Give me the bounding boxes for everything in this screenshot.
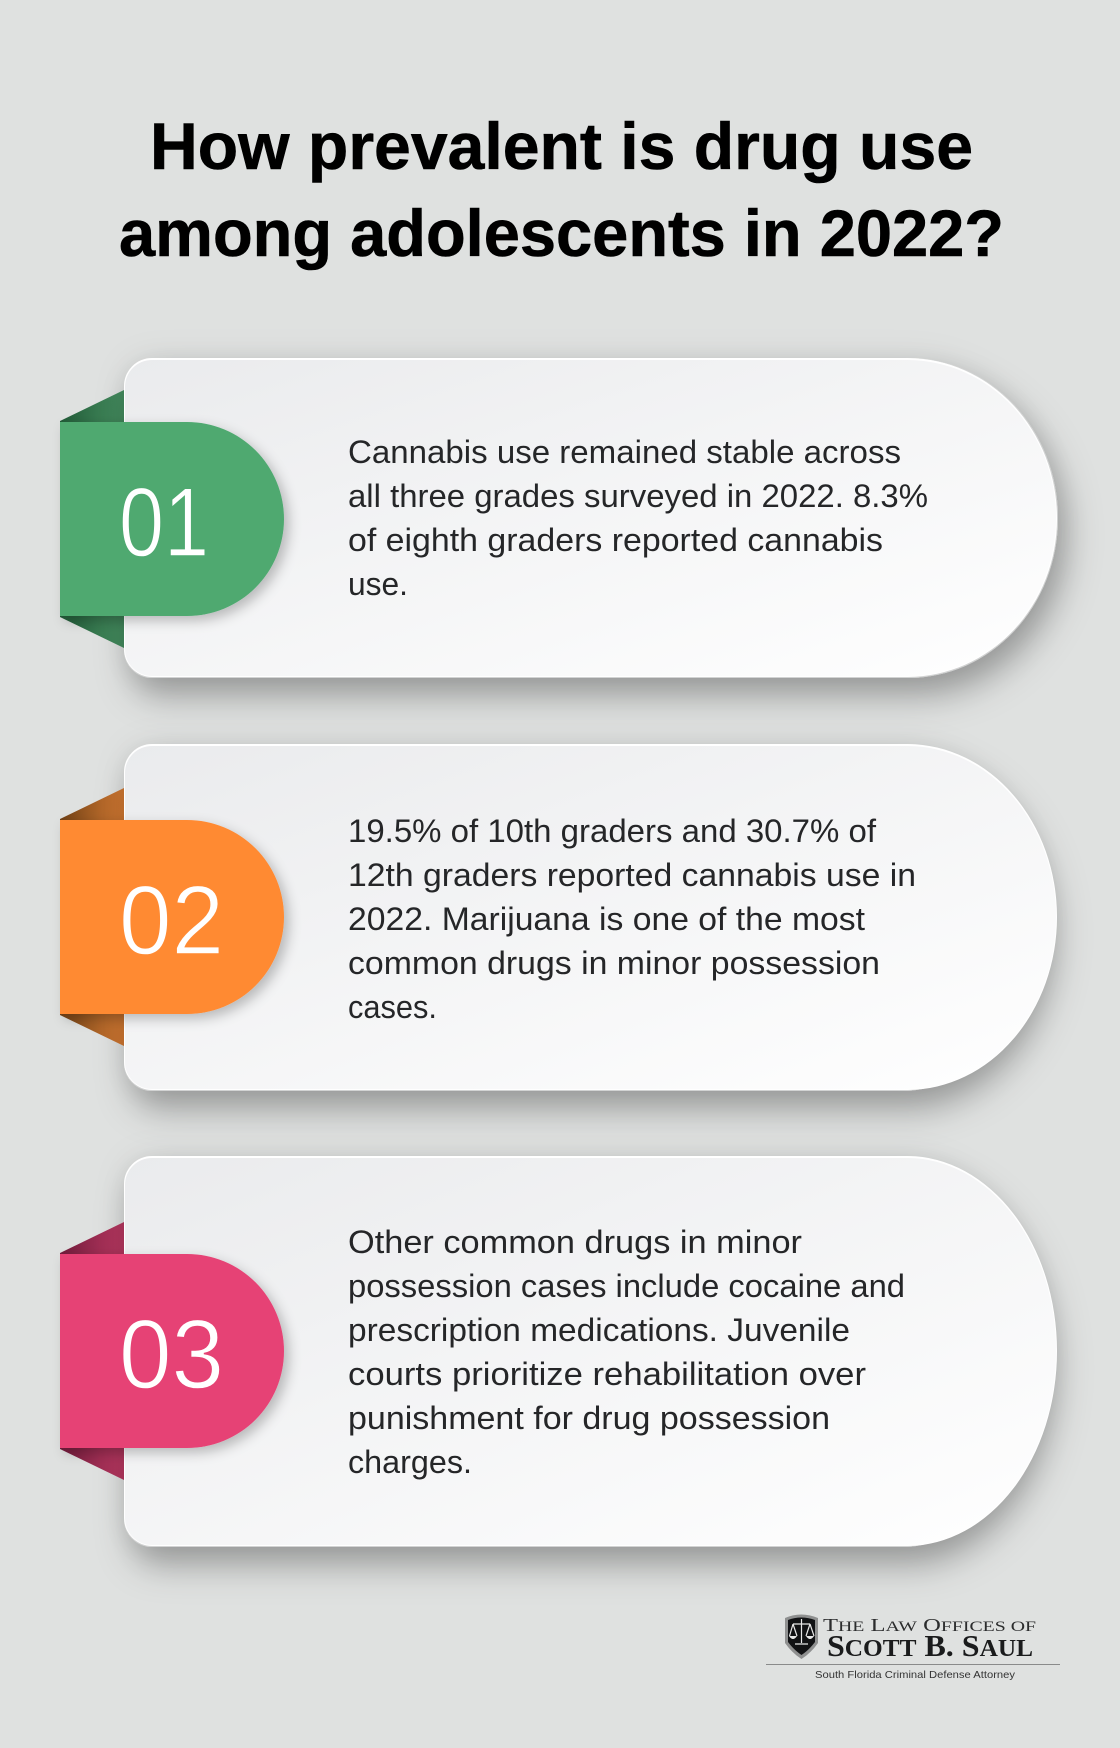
logo: firm name	[823, 1615, 1036, 1663]
text: item 3: punishment for drug possession	[348, 1400, 830, 1436]
text: item 3: prescription medications. Juvenile	[348, 1312, 850, 1348]
text: item 1: of eighth graders reported cannabis	[348, 522, 883, 558]
text: item 2: 19.5% of 10th graders and 30.7% of	[348, 813, 877, 849]
number: 01: 01	[119, 467, 209, 577]
text: item 2	[348, 813, 916, 1025]
text: item 1: Cannabis use remained stable across	[348, 434, 901, 470]
badge: 02	[60, 820, 284, 1014]
ribbon fold: item 1	[60, 390, 124, 648]
badge: 01	[60, 422, 284, 616]
title: How prevalent is drug use	[150, 109, 973, 183]
card: item 2	[124, 744, 1057, 1091]
ribbon fold: item 2	[60, 788, 124, 1046]
badge: 03	[60, 1254, 284, 1448]
logo	[766, 1614, 1060, 1681]
text: item 2: 12th graders reported cannabis use in	[348, 857, 916, 893]
number: 02: 02	[119, 865, 224, 975]
logo: firm name: SCOTT B. SAUL	[827, 1628, 1033, 1663]
panel: item 2	[60, 744, 1057, 1091]
title: among adolescents in 2022?	[119, 196, 1004, 270]
icon: shield with scales	[785, 1614, 818, 1659]
text: item 2: common drugs in minor possession	[348, 945, 880, 981]
text: item 3: charges.	[348, 1444, 472, 1480]
logo: tagline: South Florida Criminal Defense Attorney	[815, 1669, 1016, 1681]
logo: firm name: T HE L AW O FFICES OF	[823, 1615, 1036, 1635]
card: item 3	[124, 1156, 1057, 1547]
title	[119, 109, 1004, 270]
text: item 3: possession cases include cocaine and	[348, 1268, 905, 1304]
text: item 3: Other common drugs in minor	[348, 1224, 802, 1260]
ribbon fold: item 3	[60, 1222, 124, 1480]
text: item 3	[348, 1224, 905, 1480]
text: item 2: 2022. Marijuana is one of the most	[348, 901, 865, 937]
panel: item 1	[60, 358, 1058, 678]
number: 03: 03	[119, 1299, 224, 1409]
logo: divider	[766, 1664, 1060, 1665]
panel: item 3	[60, 1156, 1057, 1547]
text: item 1: use.	[348, 566, 408, 602]
card: item 1	[124, 358, 1058, 678]
text: item 1	[348, 434, 928, 602]
text: item 1: all three grades surveyed in 2022. 8.3%	[348, 478, 928, 514]
text: item 3: courts prioritize rehabilitation over	[348, 1356, 866, 1392]
text: item 2: cases.	[348, 989, 437, 1025]
